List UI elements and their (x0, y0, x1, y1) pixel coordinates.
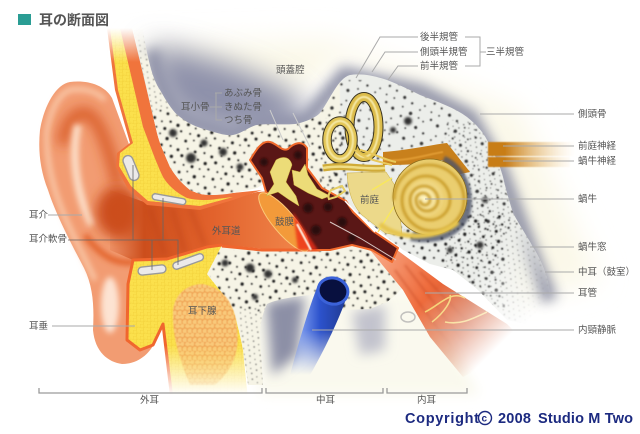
auditory ossicles (266, 157, 345, 206)
lobe and lower yellow tissue (127, 245, 320, 400)
ear canal (110, 190, 320, 260)
copyright: c (482, 414, 488, 424)
labels: 蝸牛神経 (578, 155, 617, 167)
labels: 耳垂 (29, 320, 48, 332)
labels: 前庭 (360, 194, 380, 206)
labels: 鼓膜 (275, 216, 295, 228)
semicircular canals (323, 97, 396, 168)
labels: 側頭半規管 (420, 46, 468, 58)
labels: 外耳 (140, 394, 159, 406)
pinna rim highlight (47, 89, 105, 280)
labels: 前半規管 (420, 60, 459, 72)
labels: 蝸牛窓 (578, 241, 607, 253)
region brackets (39, 388, 467, 393)
labels: 側頭骨 (578, 108, 607, 120)
nerves: vestibular and cochlear (383, 142, 575, 175)
labels: 耳下腺 (188, 305, 217, 317)
upper yellow soft tissue and orange layers (107, 28, 262, 210)
cochlea (380, 156, 472, 242)
pinna (outer ear) (39, 82, 180, 364)
eardrum (252, 187, 318, 257)
incus (292, 164, 330, 199)
lower fold (85, 235, 135, 263)
copyright: 2008 (498, 411, 531, 427)
labels: 耳管 (578, 287, 598, 299)
temporal bone, upper (135, 36, 548, 320)
labels: 耳介軟骨 (29, 233, 67, 245)
malleus (266, 157, 299, 206)
internal jugular vein (290, 275, 351, 375)
leader lines (48, 37, 574, 330)
labels: 後半規管 (420, 31, 459, 43)
copyright: Copyright (405, 411, 479, 427)
cartilage leader lines (68, 165, 178, 270)
auricular cartilage pieces (121, 154, 204, 275)
eustachian tube small ring (401, 312, 415, 322)
labels: 中耳 (316, 394, 335, 406)
temporal bone, lower (207, 246, 402, 385)
labels: 蝸牛 (578, 193, 598, 205)
lobe highlight (101, 277, 119, 333)
middle ear cavity (250, 142, 398, 262)
background: cranial cavity shading (135, 40, 600, 300)
labels: 耳介 (29, 210, 49, 221)
labels: 前庭神経 (578, 140, 617, 152)
stapes (328, 186, 345, 199)
labels: あぶみ骨 (224, 88, 262, 99)
labels: 内耳 (417, 394, 436, 406)
labels: 中耳（鼓室） (578, 266, 635, 278)
labels: 耳小骨 (181, 102, 210, 113)
copyright: Studio M Two (538, 411, 633, 427)
labels: 内頸静脈 (578, 324, 617, 336)
antihelix highlight (75, 125, 92, 225)
concha (96, 186, 140, 238)
title: 耳の断面図 (39, 12, 109, 28)
labels: つち骨 (224, 115, 253, 126)
labels: 外耳道 (212, 225, 241, 237)
lower cavity shading (245, 290, 480, 395)
labels: 頭蓋腔 (276, 64, 305, 76)
title marker (18, 14, 31, 25)
parotid gland (173, 284, 238, 385)
Eustachian tube (370, 250, 512, 376)
pinna upper groove (63, 113, 118, 185)
copyright (405, 411, 633, 427)
labels: きぬた骨 (224, 102, 262, 113)
bone marrow blobs (169, 117, 488, 253)
vestibule (345, 172, 402, 236)
labels: 三半規管 (486, 46, 525, 58)
